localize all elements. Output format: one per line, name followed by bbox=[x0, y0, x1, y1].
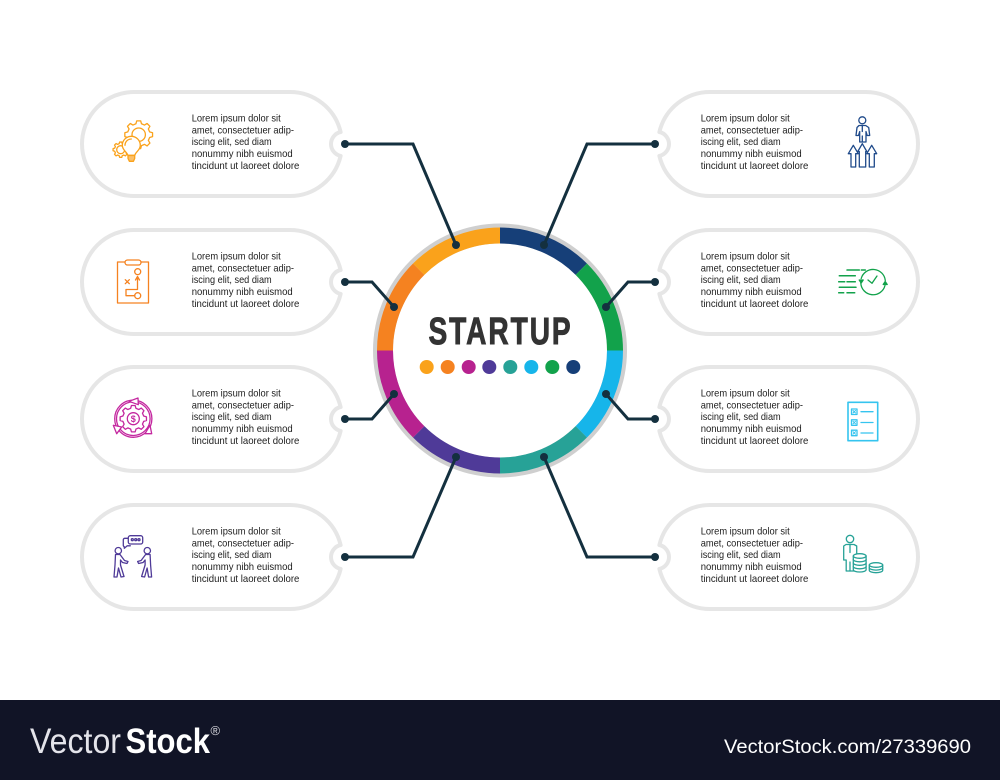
image id: VectorStock.com/27339690 bbox=[724, 737, 971, 758]
coloured dot row bbox=[420, 360, 580, 374]
text block bbox=[701, 526, 809, 585]
text block: nonummy nibh euismod bbox=[192, 562, 293, 573]
text block bbox=[192, 114, 300, 172]
text block: amet, consectetuer adip- bbox=[701, 263, 803, 274]
connector: top right bbox=[540, 140, 659, 249]
icon: two people talking bbox=[114, 536, 152, 577]
card outline bbox=[659, 92, 918, 196]
text block: tincidunt ut laoreet dolore bbox=[701, 574, 809, 585]
panel: bottom left conversation card bbox=[82, 505, 341, 609]
brand logo: ® bbox=[210, 723, 220, 738]
text block: nonummy nibh euismod bbox=[701, 424, 802, 435]
text block bbox=[192, 388, 300, 447]
panel: third left money cycle card bbox=[82, 367, 341, 471]
text block: nonummy nibh euismod bbox=[701, 149, 802, 160]
text block bbox=[701, 388, 809, 447]
text block: tincidunt ut laoreet dolore bbox=[192, 574, 300, 585]
text block: nonummy nibh euismod bbox=[192, 424, 293, 435]
card outline bbox=[82, 367, 341, 471]
text block: tincidunt ut laoreet dolore bbox=[192, 436, 300, 447]
text block: Lorem ipsum dolor sit bbox=[701, 114, 790, 124]
text block: nonummy nibh euismod bbox=[192, 287, 293, 298]
central segmented ring bbox=[373, 224, 627, 478]
card outline bbox=[659, 367, 918, 471]
title: STARTUP bbox=[428, 311, 573, 353]
text block: amet, consectetuer adip- bbox=[192, 538, 294, 549]
text block: iscing elit, sed diam bbox=[701, 550, 781, 561]
text block: Lorem ipsum dolor sit bbox=[192, 252, 281, 262]
text block: amet, consectetuer adip- bbox=[192, 125, 294, 136]
text block: tincidunt ut laoreet dolore bbox=[701, 161, 809, 172]
icon: clipboard plan bbox=[118, 260, 148, 303]
panel: bottom right investor card bbox=[659, 505, 918, 609]
brand logo: Stock bbox=[126, 722, 210, 761]
text block: amet, consectetuer adip- bbox=[192, 400, 294, 411]
connector: third right bbox=[602, 390, 659, 423]
text block: iscing elit, sed diam bbox=[192, 550, 272, 561]
text block: Lorem ipsum dolor sit bbox=[192, 114, 281, 124]
text block: iscing elit, sed diam bbox=[701, 275, 781, 286]
brand logo bbox=[30, 722, 220, 761]
text block: iscing elit, sed diam bbox=[701, 137, 781, 148]
text block: amet, consectetuer adip- bbox=[701, 400, 803, 411]
icon: dollar gear with cycle arrows: $ bbox=[131, 414, 136, 424]
text block: iscing elit, sed diam bbox=[192, 137, 272, 148]
footer band bbox=[0, 700, 1000, 780]
text block: tincidunt ut laoreet dolore bbox=[701, 436, 809, 447]
card outline bbox=[659, 505, 918, 609]
panel: top left idea card bbox=[82, 92, 341, 196]
connector: third left bbox=[341, 390, 398, 423]
connector: bottom left bbox=[341, 453, 460, 561]
text block: Lorem ipsum dolor sit bbox=[701, 252, 790, 262]
text block: iscing elit, sed diam bbox=[192, 275, 272, 286]
panel: third right checklist card bbox=[659, 367, 918, 471]
text block: Lorem ipsum dolor sit bbox=[701, 388, 790, 400]
card outline bbox=[659, 230, 918, 334]
connector: second left bbox=[341, 278, 398, 311]
card outline bbox=[82, 505, 341, 609]
icon: light bulb with gears bbox=[113, 121, 153, 161]
card outline bbox=[82, 92, 341, 196]
text block: amet, consectetuer adip- bbox=[701, 538, 803, 549]
text block: tincidunt ut laoreet dolore bbox=[701, 299, 809, 310]
text block: nonummy nibh euismod bbox=[701, 562, 802, 573]
text block bbox=[701, 252, 809, 310]
text block: amet, consectetuer adip- bbox=[701, 125, 803, 136]
icon: checklist bbox=[848, 402, 878, 441]
connector: bottom right bbox=[540, 453, 659, 561]
text block: nonummy nibh euismod bbox=[192, 149, 293, 160]
panel: top right growth card bbox=[659, 92, 918, 196]
text block: tincidunt ut laoreet dolore bbox=[192, 299, 300, 310]
text block: amet, consectetuer adip- bbox=[192, 263, 294, 274]
text block: Lorem ipsum dolor sit bbox=[701, 526, 790, 538]
text block bbox=[701, 114, 809, 172]
text block: nonummy nibh euismod bbox=[701, 287, 802, 298]
text block: Lorem ipsum dolor sit bbox=[192, 526, 281, 538]
panel: second left strategy card bbox=[82, 230, 341, 334]
text block: Lorem ipsum dolor sit bbox=[192, 388, 281, 400]
text block: iscing elit, sed diam bbox=[701, 412, 781, 423]
brand logo: Vector bbox=[30, 722, 121, 761]
card outline bbox=[82, 230, 341, 334]
connector: top left bbox=[341, 140, 460, 249]
connector: second right bbox=[602, 278, 659, 311]
icon: clock with speed lines bbox=[839, 269, 887, 295]
text block bbox=[192, 252, 300, 310]
icon: dollar gear with cycle arrows bbox=[113, 398, 152, 437]
icon: person on three arrows bbox=[848, 117, 877, 167]
text block bbox=[192, 526, 300, 585]
panel: second right speed card bbox=[659, 230, 918, 334]
text block: iscing elit, sed diam bbox=[192, 412, 272, 423]
text block: tincidunt ut laoreet dolore bbox=[192, 161, 300, 172]
icon: person with coin stacks bbox=[844, 535, 883, 573]
